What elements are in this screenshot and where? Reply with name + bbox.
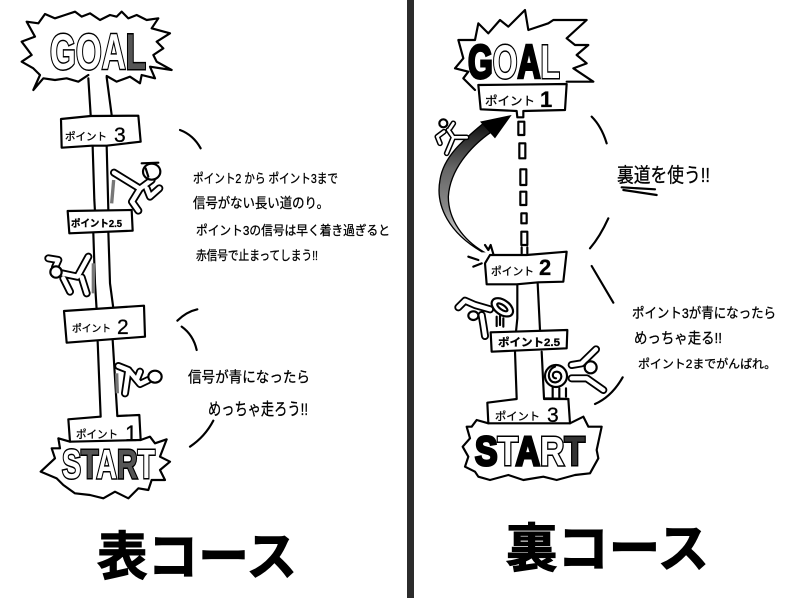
callout: use back road [617,164,710,195]
bracket upper [180,130,201,148]
callout: no signal long road: ポイント3の信号は早く着き過ぎると [196,223,390,238]
callout: run when point 3 turns green: ポイント3が青になったら [632,305,776,321]
sign: point 2: 2 [539,255,551,280]
sign: point 2 [64,306,145,343]
callout: no signal long road: 信号がない長い道のり。 [193,195,329,211]
callout: run when point 3 turns green: ポイント2までがんばれ。 [638,356,776,371]
sign: point 1: 1 [540,87,552,112]
sign: point 1: ポイント [485,94,535,108]
sign: point 3 [487,399,570,427]
heading: back course: 裏コース [506,521,709,579]
bracket lower [177,309,197,321]
divider [407,0,414,598]
road segments: front course [88,77,117,417]
start lettering: START [475,428,585,474]
sign: point 2.5 [491,330,567,352]
goal burst [455,10,593,90]
callout: no signal long road: ポイント2 から ポイント3まで [193,171,338,186]
panel: back course [437,10,776,579]
callout: run when point 3 turns green: めっちゃ走る!! [634,330,722,347]
road lower [515,283,568,399]
start burst [463,417,602,480]
callout: use back road: 裏道を使う!! [617,164,710,187]
bracket second [182,327,213,447]
heading: front course: 表コース [97,529,297,587]
sign: point 1: 1 [125,421,137,446]
goal lettering: GOAL [468,35,560,88]
goal burst [22,12,172,90]
icon: figure hitting ring [458,294,516,336]
icon: climbing figure lower [117,366,162,393]
sign: point 3: ポイント [495,410,540,423]
sign: point 2: ポイント [491,265,534,278]
dashed back road [518,122,527,253]
curved arrow [439,115,512,267]
start lettering: START [62,441,155,487]
icon: climbing figure upper [112,163,160,211]
sign: point 2: 2 [117,316,129,339]
callout: run when green: めっちゃ走ろう!! [208,400,308,419]
callout: run when green: 信号が青になったら [188,369,310,386]
icon: runner on arrow [437,119,467,153]
sign: point 1 [68,415,141,446]
sign: point 3: 3 [114,124,126,147]
sign: point 2.5: ポイント2.5 [71,218,122,230]
callout: no signal long road: 赤信号で止まってしまう!! [196,248,318,263]
sign: point 2 [485,252,567,284]
sign: point 1 [478,84,567,117]
sign: point 1: ポイント [76,428,118,441]
callout: run when green [188,369,310,419]
panel: front course [22,12,390,587]
start burst [41,437,170,498]
icon: figure with spiral shell [545,349,603,398]
bracket marks [590,117,623,404]
sign: point 2: ポイント [72,323,111,335]
sign: point 3 [61,116,141,148]
callout: no signal long road [193,171,390,263]
sign: point 3: 3 [547,404,559,427]
sign: point 3: ポイント [65,131,107,143]
goal lettering: GOAL [50,24,146,80]
icon: climbing figure middle [48,257,93,293]
callout: run when point 3 turns green [632,305,776,371]
sign: point 2.5 [68,210,133,233]
sign: point 2.5: ポイント2.5 [498,336,560,349]
